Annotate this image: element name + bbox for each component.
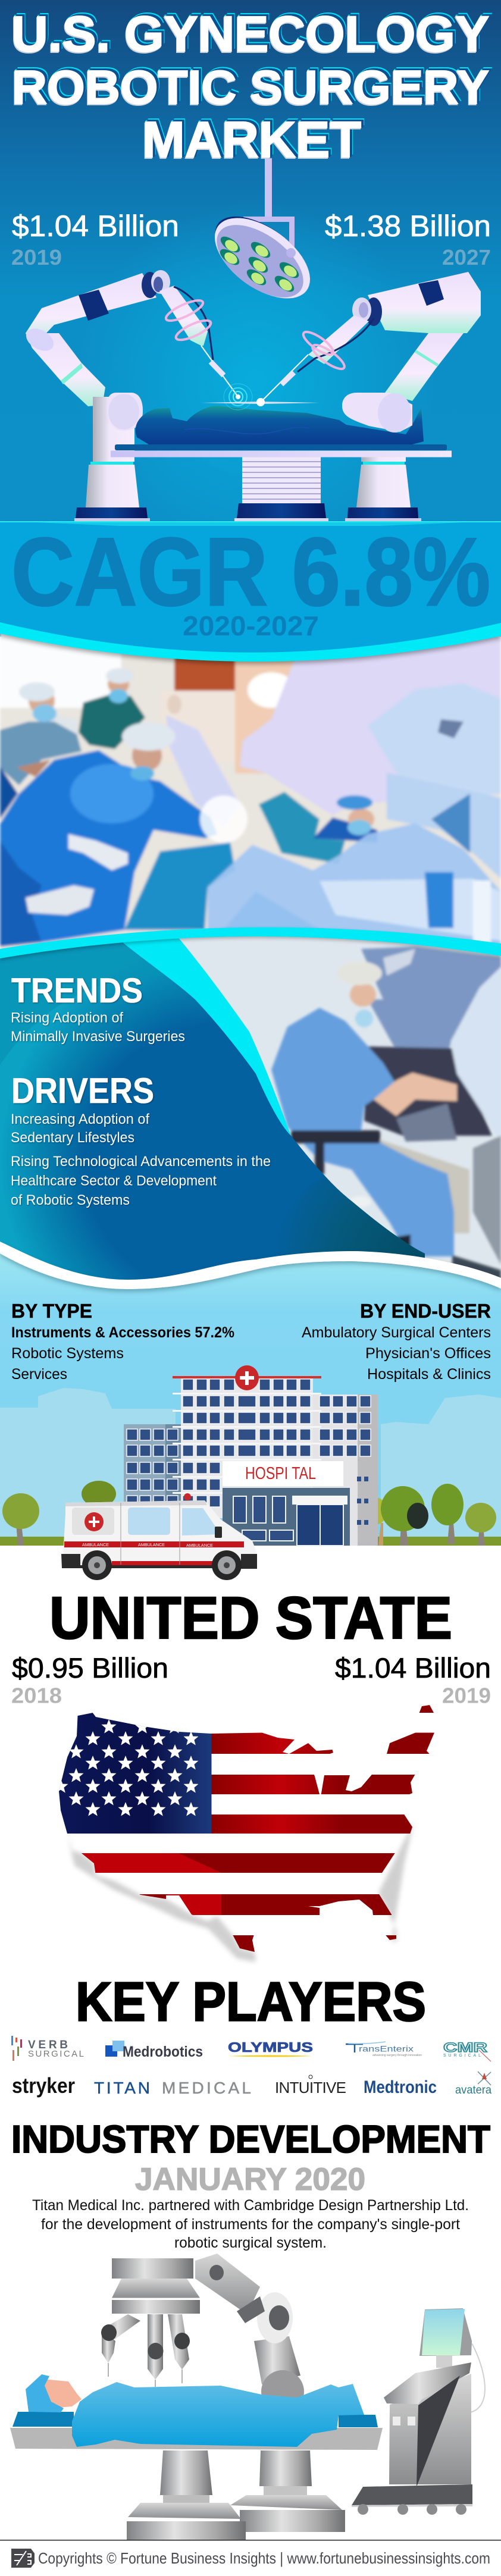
- heading: industry development: INDUSTRY DEVELOPMENT: [11, 2117, 490, 2161]
- title: MARKET: [142, 112, 361, 168]
- logo: CMR Surgical: [443, 2040, 491, 2061]
- date: January 2020: JANUARY 2020: [135, 2162, 365, 2197]
- logo: TransEnterix: advancing surgery through innovation: [372, 2054, 422, 2057]
- icon: ambulance: AMBULANCE: [138, 1543, 165, 1547]
- ground strip: [0, 1537, 501, 1546]
- stat: 2019 value: [335, 1652, 491, 1707]
- heading: key players: KEY PLAYERS: [76, 1970, 426, 2032]
- stat: 2019 market value: 2019: [11, 245, 62, 269]
- logo: CMR Surgical: SURGICAL: [443, 2054, 481, 2058]
- icon: operating table: [111, 444, 452, 522]
- panel: CAGR band: [0, 518, 501, 662]
- icon: left robotic arm: [22, 270, 238, 406]
- stat: 2027 market value: [325, 209, 491, 269]
- text block: by type: BY TYPE: [11, 1300, 92, 1322]
- logo: Medtronic: Medtronic: [364, 2077, 437, 2097]
- icon: left pedestal: [74, 393, 150, 522]
- logo: Verb Surgical: VERB: [28, 2039, 68, 2051]
- icon: ambulance: AMBULANCE: [82, 1543, 109, 1547]
- logo: TransEnterix: [346, 2042, 422, 2057]
- stat: 2019 value: 2019: [442, 1684, 491, 1707]
- logo: Verb Surgical: SURGICAL: [28, 2049, 84, 2059]
- text block: by type: Robotic Systems: [11, 1345, 124, 1362]
- logo: Titan Medical: [94, 2079, 251, 2097]
- hospital sign: HOSPI TAL: [245, 1464, 316, 1483]
- icon: Fortune Business Insights logo: [11, 2549, 35, 2568]
- text block: drivers: Healthcare Sector & Development: [11, 1173, 217, 1189]
- icon: ambulance: [61, 1493, 257, 1580]
- text block: drivers: [11, 1071, 271, 1208]
- text block: drivers: Sedentary Lifestyles: [11, 1130, 134, 1146]
- text block: trends: [11, 972, 185, 1045]
- title: ROBOTIC SURGERY: [12, 61, 489, 114]
- stat: 2018 value: $0.95 Billion: [12, 1652, 168, 1684]
- text block: development description: for the development of instruments for the company's single-port: [41, 2216, 460, 2233]
- decorative white wave: [0, 1242, 501, 1289]
- map: United States flag: [59, 1705, 434, 1963]
- icon: right robotic arm: [261, 272, 481, 402]
- cyan arc below photo: [0, 927, 501, 958]
- stat: 2027 market value: $1.38 Billion: [325, 209, 491, 243]
- panel: trends and drivers background photo: [0, 936, 501, 1291]
- robot head and arms: [101, 2254, 304, 2413]
- logo: Avatera: avatera: [455, 2084, 491, 2096]
- text block: by end-user: [302, 1300, 491, 1383]
- text block: by end-user: Hospitals & Clinics: [367, 1366, 491, 1383]
- illustration: surgical robot with patient: [10, 2254, 485, 2540]
- patient under blanket: [26, 2374, 364, 2447]
- icon: patient on table: [136, 406, 424, 444]
- decorative clouds: [0, 1388, 501, 1546]
- monitor console: [352, 2308, 485, 2515]
- title: [11, 6, 489, 168]
- logo: Titan Medical: TITAN: [94, 2079, 150, 2097]
- panel: header background: [0, 0, 501, 637]
- logo: Titan Medical: MEDICAL: [162, 2079, 251, 2097]
- stat: 2019 market value: $1.04 Billion: [12, 209, 179, 243]
- bed: [10, 2412, 383, 2450]
- icon: right shoulder and pedestal: [345, 457, 421, 522]
- icon: right shoulder joint: [342, 393, 412, 433]
- panel: sky and segmentation background: [0, 1253, 501, 1546]
- CAGR period: 2020-2027: [183, 610, 319, 641]
- text block: drivers: of Robotic Systems: [11, 1192, 130, 1208]
- text block: drivers: Rising Technological Advancements in the: [11, 1154, 271, 1170]
- robot arm pedestals: [127, 2450, 345, 2540]
- text block: drivers: Increasing Adoption of: [11, 1111, 149, 1127]
- text block: trends: TRENDS: [11, 972, 143, 1010]
- logo: Olympus: OLYMPUS: [228, 2039, 313, 2055]
- text block: by end-user: Ambulatory Surgical Centers: [302, 1324, 491, 1341]
- logo: Medrobotics: Medrobotics: [123, 2044, 203, 2060]
- text block: by end-user: Physician's Offices: [365, 1345, 491, 1362]
- stat: 2018 value: 2018: [11, 1684, 62, 1707]
- stat: 2018 value: [11, 1652, 168, 1707]
- logo: Avatera: [455, 2072, 491, 2096]
- text block: trends: Rising Adoption of: [11, 1010, 123, 1026]
- text block: by end-user: BY END-USER: [360, 1300, 491, 1322]
- icon: surgical laser glow: [201, 384, 320, 410]
- stat: 2019 value: $1.04 Billion: [335, 1652, 491, 1684]
- decorative cyan wedge: [120, 936, 291, 1136]
- stat: 2019 market value: [11, 209, 179, 269]
- decorative backlight glow: [60, 202, 452, 524]
- panel: trends and drivers: [0, 942, 425, 1289]
- logo: CMR Surgical: CMR: [443, 2040, 487, 2055]
- logo: Verb Surgical: [11, 2036, 84, 2061]
- photo: surgical team around robot: [0, 625, 501, 958]
- logo: Stryker: stryker: [12, 2073, 75, 2098]
- text block: development description: [32, 2197, 469, 2251]
- icon: hospital building: [124, 1365, 378, 1546]
- heading: united state: UNITED STATE: [49, 1585, 452, 1651]
- text block: development description: Titan Medical Inc. partnered with Cambridge Design Partnership Ltd.: [32, 2197, 469, 2214]
- text block: by type: Instruments & Accessories 57.2%: [11, 1324, 234, 1341]
- icon: surgical lamp: [201, 158, 324, 315]
- text block: trends: Minimally Invasive Surgeries: [11, 1029, 185, 1045]
- logo: Olympus: [228, 2039, 313, 2057]
- text block: development description: robotic surgical system.: [174, 2235, 327, 2251]
- icon: trees: [2, 1481, 496, 1546]
- icon: ambulance: AMBULANCE: [186, 1544, 213, 1548]
- logo: Medrobotics: [105, 2041, 203, 2060]
- logo: TransEnterix: ransEnterix: [359, 2044, 414, 2054]
- text block: by type: [11, 1300, 234, 1383]
- title: U.S. GYNECOLOGY: [11, 6, 489, 62]
- logo: Intuitive: INTUITIVE: [275, 2079, 346, 2096]
- text block: drivers: DRIVERS: [11, 1071, 154, 1111]
- text block: by type: Services: [11, 1366, 67, 1383]
- stat: 2027 market value: 2027: [442, 245, 491, 269]
